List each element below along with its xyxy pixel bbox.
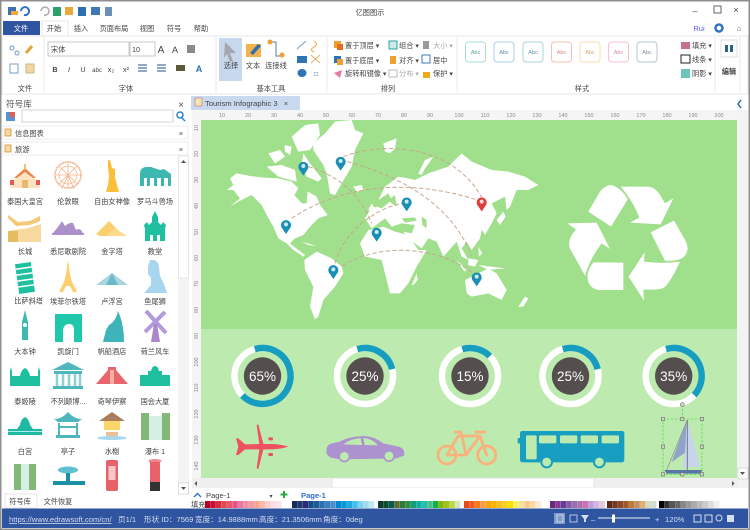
Iceland bbox=[353, 185, 363, 192]
top ruler: 170 bbox=[636, 113, 646, 119]
arrange group: 置于底层 ▾ bbox=[345, 56, 380, 65]
inland seas bbox=[388, 195, 427, 228]
symbol: London Eye bbox=[55, 162, 81, 206]
page tabs: ▾ bbox=[269, 494, 273, 500]
donut 25% bus bbox=[536, 341, 605, 411]
vertical scrollbar bbox=[737, 110, 748, 488]
category: infographic charts: × bbox=[179, 129, 183, 138]
arrange group: 保护 ▾ bbox=[433, 69, 453, 78]
search row bbox=[6, 110, 185, 122]
font group controls: abc bbox=[92, 68, 102, 74]
title bar: 亿图图示 bbox=[356, 8, 384, 17]
bottom panel tabs: 文件恢复 bbox=[44, 497, 72, 506]
symbol: post box bbox=[148, 459, 162, 491]
donut 25% bus: 25% bbox=[557, 369, 584, 384]
selection handles bbox=[661, 403, 704, 476]
symbol library panel: × bbox=[178, 100, 184, 111]
symbol: Merlion: 鱼尾狮 bbox=[144, 297, 166, 306]
fill line shadow: 填充 ▾ bbox=[692, 41, 712, 50]
Caribbean bbox=[302, 242, 317, 246]
left ruler: 130 bbox=[194, 435, 200, 445]
document tab bar: × bbox=[284, 99, 288, 108]
top ruler: 90 bbox=[427, 113, 433, 119]
symbol: phone box bbox=[106, 460, 118, 491]
top ruler: 180 bbox=[662, 113, 672, 119]
font group controls bbox=[48, 42, 203, 74]
bottom panel tabs: 符号库 bbox=[9, 497, 31, 506]
icon: airplane bbox=[236, 424, 288, 469]
left ruler: 110 bbox=[194, 384, 200, 392]
title bar: – bbox=[692, 6, 698, 16]
symbol: Taj Mahal bbox=[10, 367, 40, 406]
title bar: × bbox=[733, 5, 739, 15]
font group controls: A bbox=[158, 45, 165, 56]
font group controls: x² bbox=[123, 65, 130, 74]
symbol: British Museum: 不列颠博... bbox=[51, 397, 85, 406]
symbol: Merlion bbox=[144, 260, 167, 306]
status bar: 页1/1 bbox=[118, 515, 136, 524]
Japan bbox=[497, 212, 506, 225]
arrange group: 对齐 ▾ bbox=[399, 56, 419, 65]
symbol: Eiffel Tower bbox=[50, 260, 86, 306]
font group controls: A bbox=[196, 64, 203, 74]
top ruler: 30 bbox=[271, 113, 277, 119]
status bar: – bbox=[591, 515, 596, 524]
left ruler bbox=[192, 120, 201, 478]
arrange group: 置于顶层 ▾ bbox=[345, 41, 380, 50]
Eurasia bbox=[365, 153, 538, 260]
symbol: Thai grand palace: 泰国大皇宫 bbox=[7, 197, 43, 206]
arrange group: 居中 bbox=[433, 56, 447, 65]
left ruler: 40 bbox=[194, 203, 200, 209]
colour palette bbox=[191, 500, 719, 509]
symbol: pavilion bbox=[54, 412, 82, 456]
status bar: 高度：21.3506mm bbox=[259, 514, 322, 524]
file group icons bbox=[10, 46, 34, 73]
donut 35%: 35% bbox=[660, 369, 687, 384]
arrange group: 组合 ▾ bbox=[399, 41, 419, 50]
top ruler: 130 bbox=[532, 113, 542, 119]
document tab bar: Tourism Infographic 3 bbox=[205, 99, 278, 108]
donut 25% car: 25% bbox=[351, 369, 379, 384]
font group controls: x₂ bbox=[108, 65, 114, 74]
menu tabs: 帮助 bbox=[194, 24, 208, 33]
category: tourism: 旅游 bbox=[15, 145, 29, 154]
arrange group bbox=[334, 41, 453, 78]
symbol: fountain bbox=[53, 466, 85, 485]
page tabs: Page-1 bbox=[301, 491, 327, 500]
colour palette: 填充 bbox=[191, 500, 205, 509]
symbol: Big Ben: 大本钟 bbox=[14, 347, 36, 356]
donut 15%: 15% bbox=[456, 369, 484, 384]
top ruler: 50 bbox=[323, 113, 329, 119]
arrange group: 大小 ▾ bbox=[433, 41, 453, 50]
edit button: 编辑 bbox=[722, 67, 736, 76]
symbol: Taj Mahal: 泰姬陵 bbox=[14, 397, 36, 406]
symbol: Leaning Tower of Pisa bbox=[9, 261, 44, 310]
font group controls: U bbox=[80, 65, 86, 74]
symbol: British Museum bbox=[51, 362, 85, 406]
ribbon: 样式 bbox=[575, 84, 589, 93]
ribbon: 基本工具 bbox=[257, 84, 285, 93]
icon: sailboat selected bbox=[661, 403, 704, 476]
status bar: 角度：0deg bbox=[323, 514, 363, 524]
style swatches bbox=[466, 42, 657, 62]
symbol: Thai grand palace bbox=[7, 164, 43, 206]
status bar: https://www.edrawsoft.com/cn/ bbox=[9, 515, 112, 524]
New Zealand bbox=[518, 297, 528, 307]
font group controls: 10 bbox=[132, 45, 140, 54]
menu tabs bbox=[3, 21, 741, 36]
symbol: windmill: 荷兰风车 bbox=[141, 347, 169, 356]
selection frame bbox=[663, 405, 702, 474]
symbol: Louvre: 卢浮宫 bbox=[101, 297, 123, 306]
world map bbox=[227, 120, 538, 319]
symbol: Statue of Liberty bbox=[94, 160, 130, 206]
left ruler: 100 bbox=[194, 357, 200, 367]
symbol: Louvre bbox=[96, 273, 128, 306]
symbol: pavilion: 亭子 bbox=[61, 447, 75, 456]
status bar bbox=[2, 508, 748, 528]
symbol: Sydney Opera House bbox=[50, 221, 86, 256]
symbol: Eiffel Tower: 埃菲尔铁塔 bbox=[50, 297, 86, 306]
Canadian arctic islands bbox=[267, 123, 322, 182]
ribbon: 文件 bbox=[18, 84, 32, 93]
top ruler: 140 bbox=[558, 113, 568, 119]
panel heading: 符号库 bbox=[6, 98, 32, 109]
category: infographic charts bbox=[3, 126, 188, 139]
left ruler: 30 bbox=[194, 177, 200, 183]
symbol library panel bbox=[2, 95, 192, 508]
canvas upper panel bbox=[201, 120, 737, 329]
top ruler: 60 bbox=[349, 113, 355, 119]
symbol: Great Wall bbox=[8, 215, 41, 256]
symbol: waterside house: 水榭 bbox=[105, 447, 119, 456]
edit button bbox=[721, 40, 737, 76]
top ruler: 190 bbox=[688, 113, 698, 119]
top ruler: 150 bbox=[584, 113, 594, 119]
status bar: 120% bbox=[665, 515, 685, 524]
symbol: Chichen Itza: 奇琴伊察 bbox=[98, 397, 126, 406]
donut 65%: 65% bbox=[249, 369, 276, 384]
fill line shadow: 线条 ▾ bbox=[692, 55, 712, 64]
top ruler: 160 bbox=[610, 113, 620, 119]
symbol: Arc de Triomphe bbox=[55, 314, 82, 356]
top ruler bbox=[192, 110, 738, 120]
Southeast Asian islands bbox=[457, 247, 505, 272]
top ruler: 110 bbox=[481, 113, 489, 119]
symbol: Leaning Tower of Pisa: 比萨斜塔 bbox=[14, 297, 43, 306]
symbol: waterfall 1: 瀑布 1 bbox=[145, 447, 165, 456]
menu tabs: Rui bbox=[693, 24, 705, 33]
fill line shadow: 阴影 ▾ bbox=[692, 69, 712, 78]
menu tabs: 插入 bbox=[74, 24, 88, 33]
symbol: Chichen Itza bbox=[96, 367, 128, 406]
basic tools: ⌗ bbox=[313, 69, 319, 79]
font group controls: I bbox=[68, 65, 70, 74]
font group controls: A bbox=[172, 45, 178, 55]
menu tabs: 符号 bbox=[167, 24, 181, 33]
symbol: windmill bbox=[141, 311, 169, 356]
document tab bar bbox=[191, 96, 748, 110]
basic tools bbox=[219, 38, 320, 81]
arrange group: 旋转和镜像 ▾ bbox=[345, 69, 387, 78]
menu tabs: 视图 bbox=[140, 24, 154, 33]
top ruler: 10 bbox=[219, 113, 225, 119]
symbol scrollbar bbox=[178, 156, 189, 494]
menu tabs: 文件 bbox=[14, 24, 28, 33]
menu tabs: ⌂ bbox=[737, 24, 741, 33]
symbol: Burj Al Arab: 帆船酒店 bbox=[98, 347, 126, 356]
left ruler: 60 bbox=[194, 255, 200, 261]
symbol: White House bbox=[8, 417, 42, 456]
donut 65% bbox=[228, 341, 297, 411]
icon: bicycle bbox=[438, 432, 496, 464]
recycle symbol bbox=[567, 185, 687, 301]
font group controls: 宋体 bbox=[51, 45, 65, 54]
ribbon bbox=[2, 36, 748, 94]
top ruler: 70 bbox=[375, 113, 381, 119]
style swatches: Abc bbox=[528, 50, 538, 56]
basic tools: 选择 bbox=[224, 61, 238, 70]
icon: car bbox=[326, 436, 404, 462]
category: tourism bbox=[3, 142, 188, 155]
menu tabs: 开始 bbox=[47, 24, 61, 33]
symbol: Statue of Liberty: 自由女神像 bbox=[94, 197, 130, 206]
Arctic islands bbox=[383, 138, 433, 175]
arrange group: 分布 ▾ bbox=[399, 69, 419, 78]
South America bbox=[304, 252, 343, 319]
Australia bbox=[465, 268, 507, 300]
symbol: church: 教堂 bbox=[148, 247, 162, 256]
symbol: Burj Al Arab bbox=[98, 311, 126, 356]
style swatches: Abc bbox=[499, 50, 509, 56]
symbol: Pyramids: 金字塔 bbox=[101, 247, 123, 256]
symbol: Capitol: 国会大厦 bbox=[141, 397, 169, 406]
donut 25% car bbox=[330, 341, 400, 411]
font group controls: B bbox=[52, 65, 58, 74]
category: infographic charts: 信息图表 bbox=[15, 129, 44, 138]
left ruler: 50 bbox=[194, 229, 200, 235]
flight routes bbox=[292, 149, 482, 273]
top ruler: 80 bbox=[401, 113, 407, 119]
North America bbox=[227, 173, 328, 257]
left ruler: 10 bbox=[194, 125, 200, 131]
top ruler: 120 bbox=[506, 113, 516, 119]
basic tools: 连接线 bbox=[265, 61, 287, 70]
left ruler: 120 bbox=[194, 409, 200, 419]
symbol: Sydney Opera House: 悉尼歌剧院 bbox=[50, 247, 86, 256]
symbol: waterfall 1 bbox=[141, 413, 170, 456]
basic tools: 文本 bbox=[246, 61, 260, 70]
Greenland bbox=[313, 120, 363, 195]
icon: bus bbox=[518, 431, 624, 468]
symbol: waterside house bbox=[97, 412, 127, 456]
left ruler: 20 bbox=[194, 151, 200, 157]
ribbon: 排列 bbox=[381, 84, 395, 93]
symbol: Colosseum: 罗马斗兽场 bbox=[137, 197, 173, 206]
donut 15% bbox=[435, 341, 505, 411]
style swatches: Abc bbox=[471, 50, 480, 56]
left ruler: 140 bbox=[194, 461, 200, 471]
style swatches: Abc bbox=[585, 50, 595, 56]
fill line shadow bbox=[681, 41, 712, 78]
canvas lower panel bbox=[201, 329, 737, 478]
top ruler: 200 bbox=[714, 113, 724, 119]
symbol: Big Ben bbox=[14, 310, 36, 356]
British Isles bbox=[368, 203, 375, 212]
title bar bbox=[8, 5, 739, 17]
page tabs: Page-1 bbox=[206, 491, 230, 500]
style swatches: Abc bbox=[614, 50, 623, 56]
symbol: White House: 白宫 bbox=[18, 447, 32, 456]
left ruler: 80 bbox=[194, 307, 200, 313]
location pins bbox=[281, 157, 487, 286]
symbol: Pyramids bbox=[96, 221, 127, 256]
status bar: + bbox=[655, 515, 660, 524]
bottom panel tabs bbox=[5, 494, 72, 508]
style swatches: Abc bbox=[557, 50, 566, 56]
horizontal scrollbar bbox=[192, 478, 738, 488]
Africa bbox=[360, 227, 427, 293]
symbol: Great Wall: 长城 bbox=[18, 247, 32, 256]
symbol: London Eye: 伦敦眼 bbox=[57, 197, 79, 206]
symbol: waterfall 2 bbox=[14, 464, 36, 490]
top ruler: 40 bbox=[297, 113, 303, 119]
symbol: church bbox=[144, 211, 166, 256]
top ruler: 100 bbox=[454, 113, 464, 119]
status bar: 形状 ID：7569 bbox=[144, 514, 193, 524]
left ruler: 70 bbox=[194, 281, 200, 287]
ribbon: 字体 bbox=[119, 84, 133, 93]
style swatches: Abc bbox=[642, 50, 652, 56]
status bar: 宽度：14.9888mm bbox=[195, 514, 258, 524]
symbol: Arc de Triomphe: 凯旋门 bbox=[57, 347, 79, 356]
category: tourism: × bbox=[179, 145, 183, 154]
donut 35% bbox=[639, 341, 708, 411]
top ruler: 20 bbox=[245, 113, 251, 119]
menu tabs: 页面布局 bbox=[100, 24, 128, 33]
symbol: Colosseum bbox=[137, 167, 173, 206]
left ruler: 90 bbox=[194, 333, 200, 339]
Madagascar bbox=[412, 273, 418, 285]
page tabs bbox=[192, 488, 748, 500]
symbol: Capitol bbox=[140, 366, 170, 406]
